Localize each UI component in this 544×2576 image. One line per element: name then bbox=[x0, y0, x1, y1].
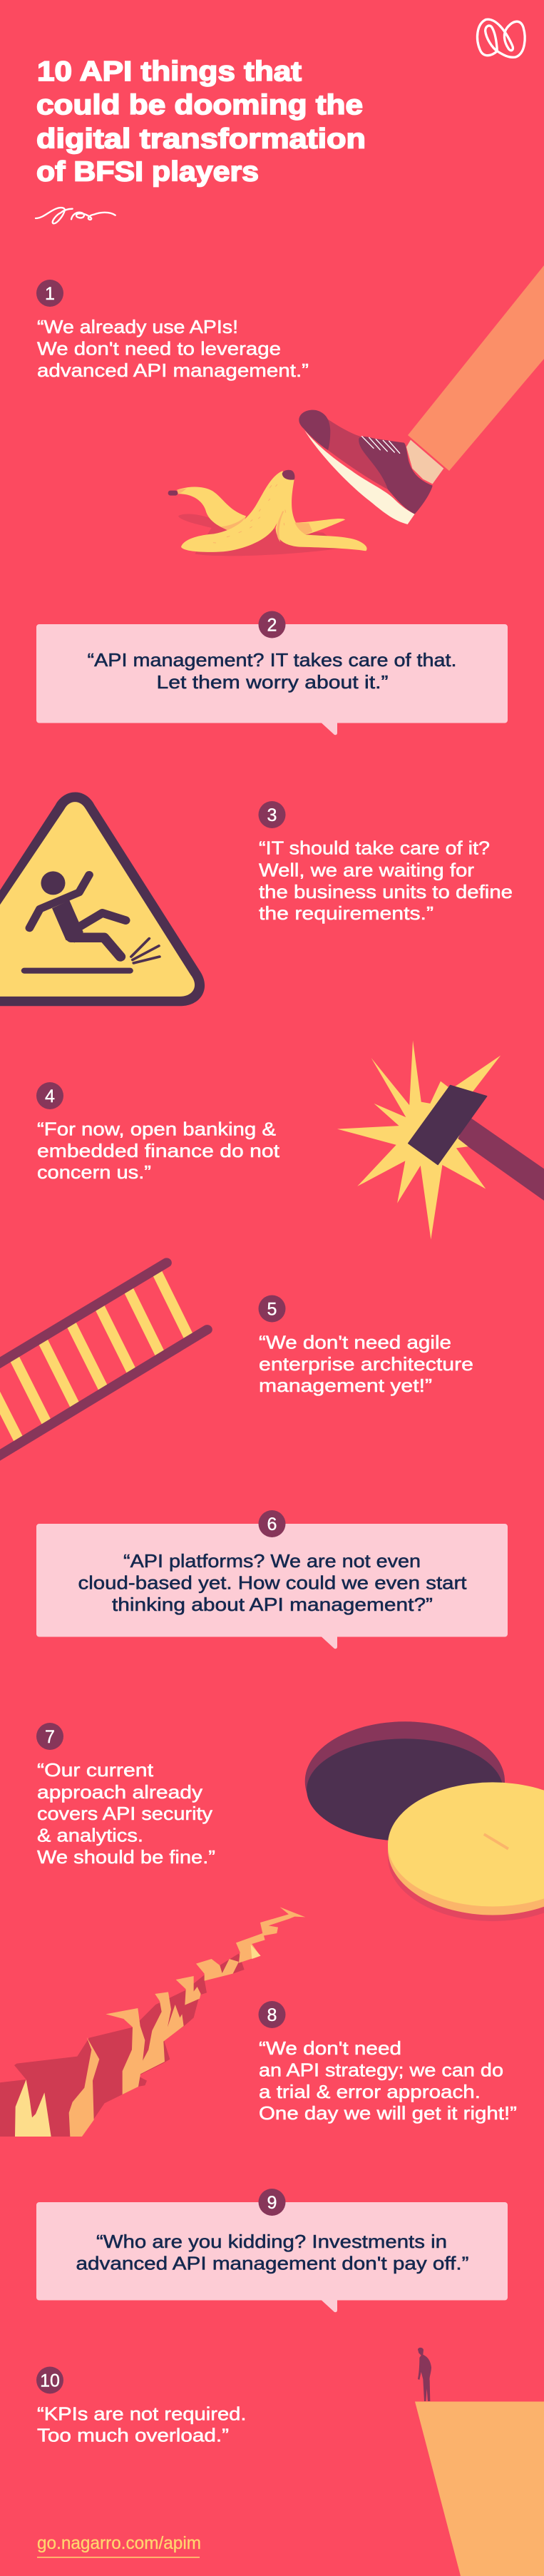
item 5 quote bbox=[259, 1331, 473, 1396]
panel: item 2 speech bubble bbox=[36, 611, 508, 735]
illustration: hammer striking with burst bbox=[337, 1040, 544, 1239]
illustration: banana peel bbox=[168, 470, 367, 556]
item 5 badge: 5 bbox=[267, 1300, 277, 1320]
item 6 badge bbox=[258, 1510, 285, 1537]
item 1 quote: advanced API management.” bbox=[37, 360, 309, 381]
item 1 quote bbox=[37, 316, 309, 381]
item 9 badge: 9 bbox=[267, 2193, 277, 2213]
item 3 quote: the requirements.” bbox=[259, 902, 433, 924]
illustration: open manhole bbox=[305, 1721, 544, 1921]
panel: item 9 speech bubble bbox=[36, 2189, 508, 2312]
item 2 quote: Let them worry about it.” bbox=[157, 671, 388, 693]
item 6 quote bbox=[78, 1550, 467, 1615]
title: of BFSI players bbox=[36, 157, 259, 187]
item 8 quote: “We don't need bbox=[259, 2037, 401, 2059]
title bbox=[36, 56, 366, 187]
item 6 badge: 6 bbox=[267, 1514, 277, 1534]
speech bubble shape bbox=[36, 624, 508, 735]
item 10 quote: Too much overload.” bbox=[37, 2424, 229, 2445]
item 7 quote bbox=[37, 1759, 215, 1868]
item 8 quote: One day we will get it right!” bbox=[259, 2102, 517, 2124]
item 8 badge: 8 bbox=[267, 2005, 277, 2025]
item 1 badge: 1 bbox=[45, 284, 55, 304]
item 2 quote: “API management? IT takes care of that. bbox=[87, 649, 456, 671]
item 4 badge: 4 bbox=[45, 1086, 55, 1106]
item 3 badge: 3 bbox=[267, 805, 277, 825]
item 6 quote: cloud-based yet. How could we even start bbox=[78, 1572, 467, 1594]
item 5 quote: enterprise architecture bbox=[259, 1353, 473, 1375]
item 1 quote: We don't need to leverage bbox=[37, 338, 281, 360]
item 3 quote: the business units to define bbox=[259, 881, 513, 902]
item 5 quote: “We don't need agile bbox=[259, 1331, 451, 1353]
item 7 quote: “Our current bbox=[37, 1759, 154, 1781]
title: could be dooming the bbox=[36, 90, 363, 121]
speech bubble shape bbox=[36, 1524, 508, 1649]
item 3 quote: Well, we are waiting for bbox=[259, 859, 474, 880]
item 10 quote: “KPIs are not required. bbox=[37, 2403, 247, 2424]
item 3 quote: “IT should take care of it? bbox=[259, 838, 490, 859]
item 10 badge bbox=[36, 2367, 63, 2394]
item 7 quote: covers API security bbox=[37, 1803, 212, 1824]
item 4 quote: embedded finance do not bbox=[37, 1140, 280, 1161]
item 9 quote bbox=[76, 2231, 469, 2274]
item 1 badge bbox=[36, 280, 63, 307]
item 7 badge: 7 bbox=[45, 1727, 55, 1747]
item 8 badge bbox=[258, 2001, 285, 2028]
item 2 badge: 2 bbox=[267, 615, 277, 635]
item 7 quote: We should be fine.” bbox=[37, 1846, 215, 1868]
item 9 quote: “Who are you kidding? Investments in bbox=[96, 2231, 447, 2252]
item 8 quote bbox=[259, 2037, 517, 2124]
item 5 quote: management yet!” bbox=[259, 1375, 432, 1396]
illustration: leg and shoe slipping bbox=[299, 265, 544, 524]
icon: logo bbox=[478, 19, 525, 57]
item 8 quote: an API strategy; we can do bbox=[259, 2059, 503, 2080]
panel: item 6 speech bubble bbox=[36, 1510, 508, 1649]
item 7 quote: approach already bbox=[37, 1781, 202, 1803]
illustration: person on cliff edge bbox=[415, 2348, 544, 2576]
item 10 quote bbox=[37, 2403, 247, 2445]
item 6 quote: “API platforms? We are not even bbox=[123, 1550, 421, 1572]
speech bubble shape bbox=[36, 2202, 508, 2312]
icon: handwritten squiggle bbox=[36, 208, 116, 223]
item 4 quote: “For now, open banking & bbox=[37, 1119, 276, 1140]
title: 10 API things that bbox=[37, 56, 302, 87]
item 9 quote: advanced API management don't pay off.” bbox=[76, 2253, 469, 2274]
item 2 quote bbox=[87, 649, 456, 693]
item 2 badge bbox=[258, 611, 285, 638]
item 5 badge bbox=[258, 1295, 285, 1323]
illustration: slippery floor warning sign bbox=[0, 793, 205, 1006]
illustration: ladder bbox=[0, 1263, 207, 1460]
item 4 quote bbox=[37, 1119, 280, 1183]
item 6 quote: thinking about API management?” bbox=[112, 1594, 433, 1615]
item 7 badge bbox=[36, 1723, 63, 1750]
item 4 badge bbox=[36, 1082, 63, 1109]
illustration: ground crack bbox=[0, 1907, 305, 2137]
item 3 badge bbox=[258, 801, 285, 828]
item 1 quote: “We already use APIs! bbox=[37, 316, 238, 337]
item 4 quote: concern us.” bbox=[37, 1161, 151, 1183]
item 8 quote: a trial & error approach. bbox=[259, 2081, 481, 2102]
item 9 badge bbox=[258, 2189, 285, 2216]
item 7 quote: & analytics. bbox=[37, 1825, 143, 1846]
title: digital transformation bbox=[36, 124, 366, 154]
item 3 quote bbox=[259, 838, 513, 924]
link: go.nagarro.com/apim: go.nagarro.com/apim bbox=[37, 2533, 201, 2553]
item 10 badge: 10 bbox=[40, 2371, 60, 2391]
